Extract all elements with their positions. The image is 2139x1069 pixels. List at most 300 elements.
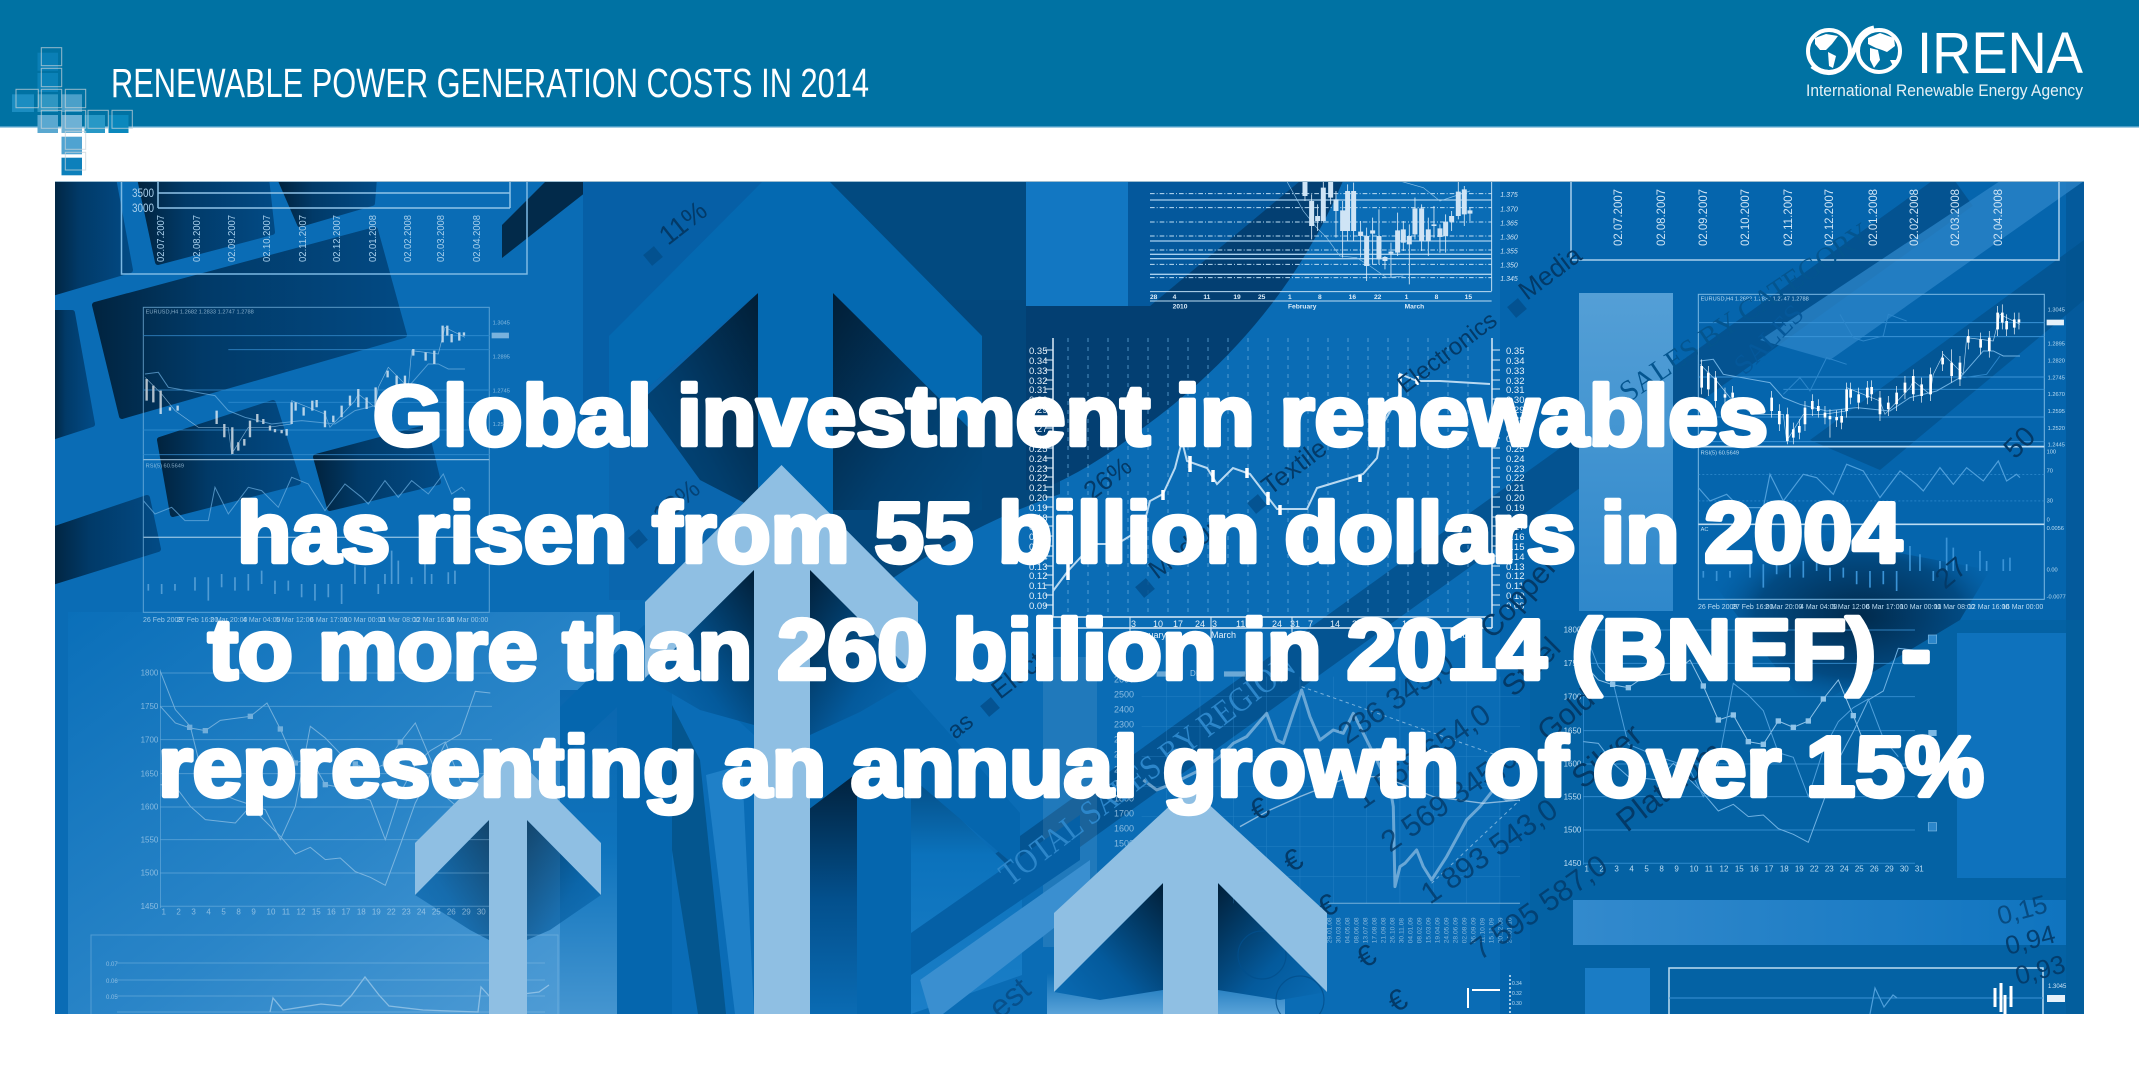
- chart: left candlestick chart: [143, 307, 510, 612]
- chart: top-left dated frame: [122, 175, 527, 274]
- chart: centre candlestick chart: 0.35: [1029, 346, 1048, 357]
- chart: centre candlestick chart: 0.33: [1029, 366, 1048, 377]
- chart: centre candlestick chart: 3: [1212, 619, 1217, 629]
- chart: line chart left: 8: [236, 907, 241, 916]
- chart: lower-centre price chart: 28.06.09: [1452, 917, 1459, 943]
- diagonal chart words: 0,93: [2012, 949, 2068, 991]
- diagonal chart words: Platinum: [1609, 733, 1729, 839]
- diagonal chart words: 0,15: [1994, 889, 2050, 931]
- time axis labels: 11 Mar 08:00: [379, 617, 420, 624]
- chart: bottom-left small chart: 0.05: [106, 995, 118, 1001]
- chart: top-right dated frame: 02.07.2007: [1611, 189, 1625, 246]
- chart: lower-centre price chart: 15.11.09: [1488, 918, 1495, 943]
- chart: centre candlestick chart: 0.09: [1029, 601, 1048, 612]
- chart: lower-centre price chart: 21.09.08: [1380, 917, 1387, 943]
- chart: line chart left: 1550: [141, 835, 159, 844]
- diagonal chart words: 50: [1997, 420, 2041, 464]
- chart: line chart right: [1564, 626, 1937, 873]
- chart: line chart left: 26: [447, 907, 456, 916]
- time axis labels: 2 Mar 20:00: [210, 617, 247, 624]
- chart: centre candlestick chart: 0.14: [1029, 552, 1048, 563]
- frame hairline: [55, 181, 2084, 182]
- chart: lower-centre price chart: 2000: [1114, 765, 1134, 775]
- chart: top-left dated frame: 02.10.2007: [262, 215, 273, 262]
- chart: top candlestick chart: 1.345: [1500, 276, 1518, 283]
- chart: lower-centre price chart: 2500: [1114, 690, 1134, 700]
- chart: line chart left: 4: [206, 907, 211, 916]
- diagonal chart words: €: [1382, 982, 1414, 1019]
- diagonal chart words: Media: [1513, 239, 1588, 306]
- chart: left candlestick chart: 1.3045: [493, 320, 510, 326]
- chart: centre candlestick chart: 0.34: [1029, 356, 1048, 367]
- chart: centre candlestick chart: 0.24: [1506, 454, 1524, 465]
- chart: centre candlestick chart: 0.24: [1029, 454, 1048, 465]
- time axis labels: 11 Mar 08:00: [1934, 604, 1975, 611]
- chart: top-left dated frame: 02.04.2008: [472, 215, 483, 262]
- chart: line chart right: 1: [1584, 864, 1589, 873]
- band titles: SALES: [1728, 299, 1810, 381]
- dark column behind large arrow: [583, 181, 1343, 601]
- chart: centre candlestick chart: 0.25: [1029, 444, 1048, 455]
- diagonal chart words: Silver: [1564, 716, 1649, 795]
- chart: top candlestick chart: February: [1288, 304, 1317, 311]
- chart: centre candlestick chart: 0.10: [1506, 591, 1524, 602]
- chart: line chart left: 1650: [141, 769, 159, 778]
- chart: lower-centre price chart: 08.02.09: [1416, 917, 1423, 943]
- chart: top candlestick chart: 16: [1349, 294, 1356, 301]
- chart: right candlestick chart: 1.2445: [2048, 442, 2065, 448]
- headline text: representing an annual growth of over 15%: [158, 720, 1984, 815]
- chart: lower-centre price chart: 20.12.09: [1497, 917, 1504, 943]
- chart: top candlestick chart: 25: [1258, 294, 1266, 301]
- time axis labels: 4 Mar 04:00: [243, 617, 280, 624]
- icon: pale arrow left: [415, 750, 601, 1014]
- chart: line chart right: 11: [1705, 864, 1714, 873]
- chart: right candlestick chart: -0.0077: [2047, 594, 2066, 600]
- small lower block: [1585, 968, 1650, 1014]
- diagonal chart words: 10%: [647, 473, 706, 530]
- keyboard keys: [52, 178, 438, 582]
- chart: top-right dated frame: 02.12.2007: [1822, 189, 1836, 246]
- small chart: lower-centre mini candle: [1468, 975, 1522, 1014]
- chart: right candlestick chart: 100: [2047, 450, 2056, 456]
- chart: line chart right: 2: [1599, 864, 1604, 873]
- chart: right candlestick chart: EURUSD,H4 1.2682 1.2833 1.2747 1.2788: [1701, 296, 1809, 302]
- time axis labels: 6 Mar 17:00: [1866, 604, 1903, 611]
- chart: lower-centre price chart: [1114, 669, 1520, 943]
- diagonal chart words: est: [981, 970, 1037, 1025]
- chart: line chart right: 1700: [1564, 692, 1582, 701]
- chart: centre candlestick chart: 0.23: [1029, 464, 1048, 475]
- chart: centre candlestick chart: 31: [1290, 619, 1300, 629]
- chart: line chart left: 1750: [141, 702, 159, 711]
- chart: line chart right: 1450: [1564, 859, 1582, 868]
- chart: left candlestick chart: 1.2895: [493, 355, 510, 361]
- chart: left candlestick chart: RSI(5) 60.5649: [146, 464, 184, 470]
- chart: line chart left: 11: [282, 907, 291, 916]
- chart: centre candlestick chart: 0.11: [1506, 581, 1524, 592]
- time axis labels: [143, 604, 2043, 624]
- chart: right candlestick chart: 0.00: [2047, 567, 2058, 573]
- chart: centre candlestick chart: 14: [1330, 619, 1340, 629]
- chart: centre candlestick chart: 17: [1173, 619, 1183, 629]
- chart: line chart right: 8: [1659, 864, 1664, 873]
- chart: centre candlestick chart: 0.22: [1506, 473, 1524, 484]
- chart: line chart right: 31: [1915, 864, 1924, 873]
- chart: line chart left: 1800: [141, 669, 159, 678]
- icon: large pale arrow centre: [645, 465, 918, 1014]
- chart: top-left dated frame: 02.02.2008: [403, 215, 414, 262]
- chart: top-left dated frame: 02.03.2008: [436, 215, 447, 262]
- chart: centre candlestick chart: 7: [1308, 619, 1313, 629]
- pale column centre: [1043, 657, 1097, 947]
- logo tagline: International Renewable Energy Agency: [1806, 81, 2083, 100]
- chart: centre candlestick chart: 27: [1067, 619, 1077, 629]
- chart: centre candlestick chart: 0.28: [1506, 415, 1524, 426]
- diagonal chart words: Medium: [1143, 505, 1234, 585]
- diagonal chart words: 236 345,0: [1332, 647, 1460, 751]
- chart: top candlestick chart: 4: [1173, 294, 1177, 301]
- chart: top-left dated frame: 3500: [132, 186, 154, 200]
- chart: line chart right: 4: [1629, 864, 1634, 873]
- time axis labels: 5 Mar 12:00: [276, 617, 313, 624]
- chart: top candlestick chart: March: [1405, 304, 1424, 311]
- chart: centre candlestick chart: 0.27: [1029, 424, 1048, 435]
- right block: [1957, 633, 2066, 878]
- chart: centre candlestick chart: 0.26: [1506, 434, 1524, 445]
- chart: left candlestick chart: 1.2595: [493, 422, 510, 428]
- diagonal chart words: as: [942, 708, 979, 745]
- chart: centre candlestick chart: 0.15: [1506, 542, 1524, 553]
- diagonal chart words: €: [1244, 791, 1276, 828]
- chart: centre candlestick chart: 0.18: [1506, 513, 1524, 524]
- chart: top candlestick chart: 2010: [1173, 304, 1188, 311]
- chart: lower-centre price chart: 04.05.08: [1344, 917, 1351, 943]
- icon: IRENA square cross motif: [12, 48, 132, 175]
- chart: centre candlestick chart: 0.19: [1029, 503, 1048, 514]
- chart: centre candlestick chart: 0.30: [1029, 395, 1048, 406]
- chart: centre candlestick chart: 0.16: [1029, 532, 1048, 543]
- chart: line chart left: 22: [387, 907, 396, 916]
- chart: top candlestick chart: 1.375: [1500, 192, 1518, 199]
- chart: top-right dated frame: 02.10.2007: [1738, 189, 1752, 246]
- chart: centre candlestick chart: 0.33: [1506, 366, 1524, 377]
- chart: top candlestick chart: 19: [1233, 294, 1241, 301]
- chart: line chart left: 1700: [141, 735, 159, 744]
- chart: right candlestick chart: 1.2520: [2048, 426, 2065, 432]
- chart: lower-centre price chart: 19.04.09: [1434, 917, 1441, 943]
- chart: centre candlestick chart: 0.32: [1506, 376, 1524, 387]
- chart: line chart left: 30: [477, 907, 486, 916]
- chart: line chart left: 1600: [141, 803, 159, 812]
- chart: line chart right: 1750: [1564, 659, 1582, 668]
- chart: bottom-left small chart: 0.06: [106, 979, 118, 985]
- chart: centre candlestick chart: March: [1211, 630, 1236, 640]
- chart: line chart left: 12: [297, 907, 306, 916]
- chart: centre candlestick chart: 0.29: [1029, 405, 1048, 416]
- chart: line chart right: 23: [1825, 864, 1834, 873]
- chart: line chart left: 2: [176, 907, 181, 916]
- chart: top candlestick chart: 22: [1374, 294, 1382, 301]
- lower columns: [560, 690, 1022, 1014]
- diagonal chart words: Gold: [1531, 682, 1601, 748]
- chart: centre candlestick chart: 0.23: [1506, 464, 1524, 475]
- chart: line chart left: 3: [191, 907, 196, 916]
- band titles: TOTAL SALES BY REGION: [993, 647, 1302, 893]
- chart: top candlestick chart: 1.370: [1500, 206, 1518, 213]
- chart: centre candlestick chart: 0.20: [1029, 493, 1048, 504]
- chart: line chart right: 22: [1810, 864, 1819, 873]
- chart: right candlestick chart: 1.2595: [2048, 409, 2065, 415]
- chart: line chart right: 19: [1795, 864, 1804, 873]
- chart: centre candlestick chart: June: [1458, 630, 1478, 640]
- diagonal chart words: 2 569 345,0: [1375, 741, 1524, 859]
- chart: top-left dated frame: 02.12.2007: [332, 215, 343, 262]
- chart: line chart left: 1450: [141, 902, 159, 911]
- low rectangle behind small arrow: [1047, 973, 1285, 1014]
- chart: top-left dated frame: 3000: [132, 201, 154, 215]
- chart: centre candlestick chart: 0.15: [1029, 542, 1048, 553]
- diagonal chart words: [647, 195, 2068, 1025]
- diagonal chart words: Steel: [1496, 631, 1567, 703]
- chart: right candlestick chart: 1.2820: [2048, 358, 2065, 364]
- chart: line chart right: 3: [1614, 864, 1619, 873]
- chart: centre candlestick chart: 0.32: [1029, 376, 1048, 387]
- chart: line chart left: 25: [432, 907, 441, 916]
- diagonal chart words: Copper: [1474, 549, 1564, 645]
- chart: lower-centre price chart: X: [1248, 669, 1254, 678]
- time axis labels: 12 Mar 16:00: [413, 617, 454, 624]
- chart: left candlestick chart: EURUSD,H4 1.2682 1.2833 1.2747 1.2788: [146, 309, 254, 315]
- time axis labels: 16 Mar 00:00: [2002, 604, 2043, 611]
- chart: lower-centre price chart: 1900: [1114, 779, 1134, 789]
- time axis labels: 10 Mar 00:00: [344, 617, 385, 624]
- chart: line chart left: 24: [417, 907, 426, 916]
- chart: line chart left: 1: [161, 907, 166, 916]
- chart: bottom-left small chart: 0.07: [106, 962, 118, 968]
- chart: centre candlestick chart: 0.25: [1506, 444, 1524, 455]
- chart: right candlestick chart: [1698, 294, 2066, 600]
- chart: top candlestick chart: 1.360: [1500, 234, 1518, 241]
- chart: centre candlestick chart: 0.34: [1506, 356, 1524, 367]
- chart: centre candlestick chart: 0.16: [1506, 532, 1524, 543]
- chart: right candlestick chart: 1.2670: [2048, 392, 2065, 398]
- decorative circles: [1238, 931, 1324, 1024]
- time axis labels: 12 Mar 16:00: [1968, 604, 2009, 611]
- diagonal chart words: 1 568 654,0: [1348, 698, 1497, 816]
- chart: lower-centre price chart: 04.01.09: [1407, 917, 1414, 943]
- chart: bottom-left small chart: [90, 934, 558, 1014]
- headline text: has risen from 55 billion dollars in 2004: [237, 486, 1902, 581]
- chart: lower-centre price chart: 30.11.08: [1398, 918, 1405, 943]
- chart: centre candlestick chart: 0.14: [1506, 552, 1524, 563]
- diagonal chart words: €: [1312, 887, 1344, 924]
- chart: top-right dated frame: 02.02.2008: [1907, 189, 1921, 246]
- icon: pale arrow right: [1054, 787, 1327, 1014]
- chart: right candlestick chart: 1.3045: [2048, 307, 2065, 313]
- chart: lower-centre price chart: 26.10.08: [1389, 917, 1396, 943]
- chart: line chart right: 10: [1690, 864, 1699, 873]
- chart: line chart right: 29: [1885, 864, 1894, 873]
- legend marker squares: [628, 246, 1527, 717]
- chart: centre candlestick chart: 0.13: [1029, 562, 1048, 573]
- chart: line chart left: 9: [251, 907, 256, 916]
- chart: centre candlestick chart: 0.26: [1029, 434, 1048, 445]
- chart: centre candlestick chart: 0.31: [1506, 385, 1524, 396]
- chart: top candlestick chart: 11: [1203, 294, 1211, 301]
- band titles: SALES BY CATEGORY: [1613, 216, 1876, 409]
- chart: top candlestick chart: 1.350: [1500, 263, 1518, 270]
- icon: infinity globes: [1808, 28, 1900, 73]
- chart: lower-centre price chart: 02.08.09: [1461, 917, 1468, 943]
- chart: lower-centre price chart: 2400: [1114, 705, 1134, 715]
- chart: top-left dated frame: 02.09.2007: [227, 215, 238, 262]
- chart: centre candlestick chart: 11: [1236, 619, 1245, 629]
- headline text: Global investment in renewables: [373, 369, 1768, 464]
- chart: centre candlestick chart: 0.09: [1506, 601, 1524, 612]
- chart: lower-centre price chart: 1500: [1114, 839, 1134, 849]
- chart: line chart right: 26: [1870, 864, 1879, 873]
- diagonal chart words: Electronics: [1392, 307, 1502, 399]
- chart: centre candlestick chart: 0.28: [1029, 415, 1048, 426]
- dark key stripe: [502, 182, 583, 258]
- chart: lower-centre price chart: 13.07.08: [1362, 917, 1369, 943]
- chart: lower-centre price chart: 2300: [1114, 719, 1134, 729]
- chart: top candlestick chart: 1.365: [1500, 220, 1518, 227]
- chart: top candlestick chart: 1.355: [1500, 248, 1518, 255]
- chart: centre candlestick chart: 0.30: [1506, 395, 1524, 406]
- chart: lower-centre price chart: 1800: [1114, 794, 1134, 804]
- logo word: IRENA: [1917, 21, 2083, 86]
- chart: centre candlestick chart: 0.19: [1506, 503, 1524, 514]
- chart: lower-centre price chart: 1700: [1114, 809, 1134, 819]
- chart: line chart right: 1500: [1564, 826, 1582, 835]
- lower-centre blue arrow: [810, 760, 1020, 996]
- chart: line chart right: 1800: [1564, 626, 1582, 635]
- logo: IRENA: [1806, 21, 2083, 100]
- chart: centre candlestick chart: 0.13: [1506, 562, 1524, 573]
- chart: right candlestick chart: 1.2895: [2048, 342, 2065, 348]
- chart: lower-centre price chart: 11.10.09: [1479, 918, 1486, 943]
- chart: top candlestick chart: 28: [1150, 294, 1158, 301]
- chart: line chart left: 10: [267, 907, 276, 916]
- chart: centre candlestick chart: 0.31: [1029, 385, 1048, 396]
- diagonal chart words: Electr: [985, 640, 1056, 705]
- chart: centre candlestick chart: 0.22: [1029, 473, 1048, 484]
- chart: right candlestick chart: 0: [2047, 518, 2050, 524]
- time axis labels: 10 Mar 00:00: [1900, 604, 1941, 611]
- chart: centre candlestick chart: 0.35: [1506, 346, 1524, 357]
- chart: bottom-right frame: 1.3045: [2048, 984, 2067, 990]
- chart: lower-centre price chart: 2600: [1114, 675, 1134, 685]
- diagonal chart words: €: [1351, 938, 1382, 975]
- time axis labels: 26 Feb 2009: [1698, 604, 1737, 611]
- chart: lower-centre price chart: 1600: [1114, 824, 1134, 834]
- chart: top candlestick chart: 15: [1465, 294, 1472, 301]
- chart: centre candlestick chart: 24: [1195, 619, 1205, 629]
- chart: top-left dated frame: 02.07.2007: [156, 215, 167, 262]
- diagonal chart words: 0,94: [2002, 919, 2058, 961]
- chart: centre candlestick chart: February: [1130, 630, 1167, 640]
- chart: top candlestick chart: 8: [1435, 294, 1439, 301]
- chart: line chart right: 1650: [1564, 726, 1582, 735]
- dark diagonal band right: [1810, 240, 2084, 470]
- panel: background collage: [52, 170, 2090, 1025]
- time axis labels: 4 Mar 04:00: [1800, 604, 1837, 611]
- chart: right candlestick chart: RSI(5) 60.5649: [1701, 451, 1739, 457]
- chart: line chart right: 5: [1644, 864, 1649, 873]
- top light block: [1026, 181, 1128, 306]
- dark diagonal band: [996, 182, 1970, 866]
- chart: right candlestick chart: 1.2745: [2048, 375, 2065, 381]
- chart: centre candlestick chart: 3: [1131, 619, 1136, 629]
- chart: top-right dated frame: 02.04.2008: [1991, 189, 2005, 246]
- chart: centre candlestick chart: 0.12: [1506, 571, 1524, 582]
- chart: right candlestick chart: 70: [2047, 469, 2053, 475]
- chart: line chart right: 24: [1840, 864, 1849, 873]
- band titles: [993, 216, 1876, 893]
- chart: line chart left: 18: [357, 907, 366, 916]
- large dark-blue arrow: [609, 182, 982, 510]
- diagonal chart words: 7 595 587,0: [1465, 849, 1614, 967]
- time axis labels: 27 Feb 16:00: [1732, 604, 1773, 611]
- chart: lower-centre price chart: 24.05.09: [1443, 917, 1450, 943]
- chart: centre candlestick chart: 0.20: [1506, 493, 1524, 504]
- chart: line chart left: 1500: [141, 869, 159, 878]
- chart: line chart left: 15: [312, 907, 321, 916]
- dark band crossing lower notch: [911, 815, 1080, 975]
- chart: line chart right: 15: [1735, 864, 1744, 873]
- chart: line chart right: 17: [1765, 864, 1774, 873]
- chart: lower-centre price chart: 2200: [1114, 735, 1134, 745]
- chart: line chart right: 12: [1720, 864, 1729, 873]
- header band: [0, 0, 2139, 128]
- chart: left candlestick chart: 1.2745: [493, 388, 510, 394]
- chart: lower-centre price chart: 30.03.08: [1335, 917, 1342, 943]
- chart: top candlestick chart: 8: [1318, 294, 1322, 301]
- pale diagonal band right: [1760, 181, 2084, 360]
- chart: top candlestick chart: 1: [1405, 294, 1409, 301]
- headline text: [158, 369, 1984, 815]
- wide band block: [1573, 900, 2066, 945]
- lower-left blue arrow: [578, 648, 620, 1014]
- time axis labels: 6 Mar 17:00: [310, 617, 347, 624]
- chart: centre candlestick chart: 0.17: [1029, 522, 1048, 533]
- chart: centre candlestick chart: April: [1292, 630, 1310, 640]
- chart: line chart left: 19: [372, 907, 381, 916]
- diagonal chart words: 11%: [653, 195, 713, 251]
- diagonal chart words: Textile: [1256, 432, 1332, 501]
- chart: top-right dated frame: [1570, 182, 2060, 261]
- chart: top-left dated frame: 02.11.2007: [298, 215, 309, 262]
- chart: line chart right: 9: [1674, 864, 1679, 873]
- chart: bottom-right frame: [1669, 968, 2067, 1020]
- small chart: lower-centre mini candle: 0.30: [1512, 1001, 1522, 1007]
- chart: line chart left: 5: [221, 907, 226, 916]
- small chart: lower-centre mini candle: 0.34: [1512, 981, 1522, 987]
- chart: lower-centre price chart: 24.01.10: [1506, 917, 1513, 943]
- chart: right candlestick chart: AC: [1701, 527, 1709, 533]
- chart: right candlestick chart: 0.0056: [2047, 526, 2064, 532]
- time axis labels: 16 Mar 00:00: [447, 617, 488, 624]
- pale strip lower: [920, 860, 1090, 1014]
- chart: centre candlestick chart: 0.21: [1506, 483, 1524, 494]
- diagonal chart words: 27: [1929, 551, 1973, 595]
- chart: line chart right: 1550: [1564, 792, 1582, 801]
- chart: top-left dated frame: 02.08.2007: [192, 215, 203, 262]
- chart: lower-centre price chart: 06.09.09: [1470, 917, 1477, 943]
- shadow patch under right chart: [1727, 540, 1982, 692]
